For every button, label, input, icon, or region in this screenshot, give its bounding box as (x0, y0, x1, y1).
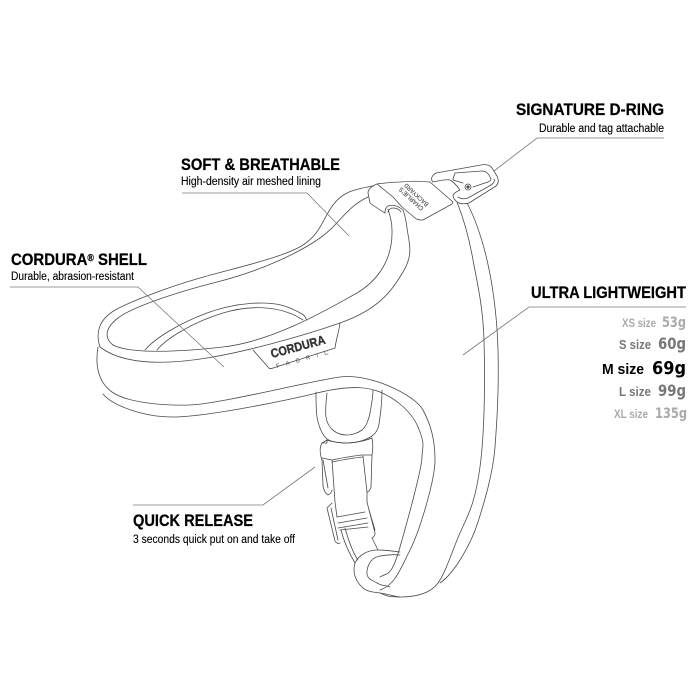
leader line: cordura shell (10, 287, 224, 367)
buckle (320, 438, 373, 517)
slider adjuster (327, 502, 375, 543)
upper strap (98, 185, 377, 347)
weight: xs size: XS size (622, 318, 656, 330)
weight: xs size (622, 315, 686, 331)
weight: xl size: XL size (614, 409, 648, 421)
leader line: ultra lightweight (463, 307, 686, 355)
cordura label text: FABRIC (276, 350, 330, 370)
weight: s size: S size (619, 337, 651, 352)
brand tag text: CHARLIE'S (397, 185, 425, 212)
weight: s size: 60g (658, 334, 686, 353)
brand tag (377, 180, 453, 220)
callout: cordura shell (10, 250, 224, 367)
description: quick release: 3 seconds quick put on and take off (133, 534, 296, 546)
description: cordura shell: Durable, abrasion-resistant (11, 271, 135, 283)
weight: m size (602, 358, 686, 379)
weight: s size (619, 334, 686, 353)
heading: quick release: QUICK RELEASE (133, 511, 253, 530)
strap coil (354, 550, 400, 597)
heading: cordura shell: SHELL (94, 250, 147, 269)
cordura label (253, 323, 340, 371)
leader line: soft and breathable (182, 193, 349, 236)
callout: signature d-ring (494, 100, 664, 171)
heading: soft and breathable: SOFT & BREATHABLE (181, 155, 340, 174)
callout: quick release (133, 467, 315, 546)
weight: l size (619, 381, 686, 400)
neck opening (145, 303, 307, 350)
weight: m size: M size (602, 361, 644, 378)
callout: ultra lightweight (463, 283, 687, 422)
harness illustration (97, 165, 498, 597)
brand tag text: BACKYARD (403, 181, 431, 208)
weight: xl size (614, 406, 687, 422)
cordura label text: CORDURA (269, 333, 327, 361)
weight: m size: 69g (652, 358, 686, 379)
heading: cordura shell: ® (87, 253, 94, 264)
weight: xl size: 135g (655, 406, 687, 422)
weight: l size: 99g (658, 381, 686, 400)
belly loop (316, 390, 382, 443)
leader line: signature d-ring (494, 138, 664, 171)
heading: signature d-ring: SIGNATURE D-RING (516, 100, 664, 119)
weight: xs size: 53g (662, 315, 686, 331)
shoulder patch (368, 184, 403, 213)
right long strap (380, 202, 498, 597)
heading: cordura shell: CORDURA (11, 250, 98, 269)
callout: soft and breathable (181, 155, 349, 236)
description: soft and breathable: High-density air meshed lining (181, 176, 321, 188)
lower strap (341, 528, 378, 563)
d-ring (432, 165, 498, 204)
cordura label text (269, 333, 330, 371)
weight: l size: L size (619, 384, 651, 399)
rim and band (97, 209, 435, 590)
description: signature d-ring: Durable and tag attachable (539, 123, 664, 135)
leader line: quick release (133, 467, 315, 505)
